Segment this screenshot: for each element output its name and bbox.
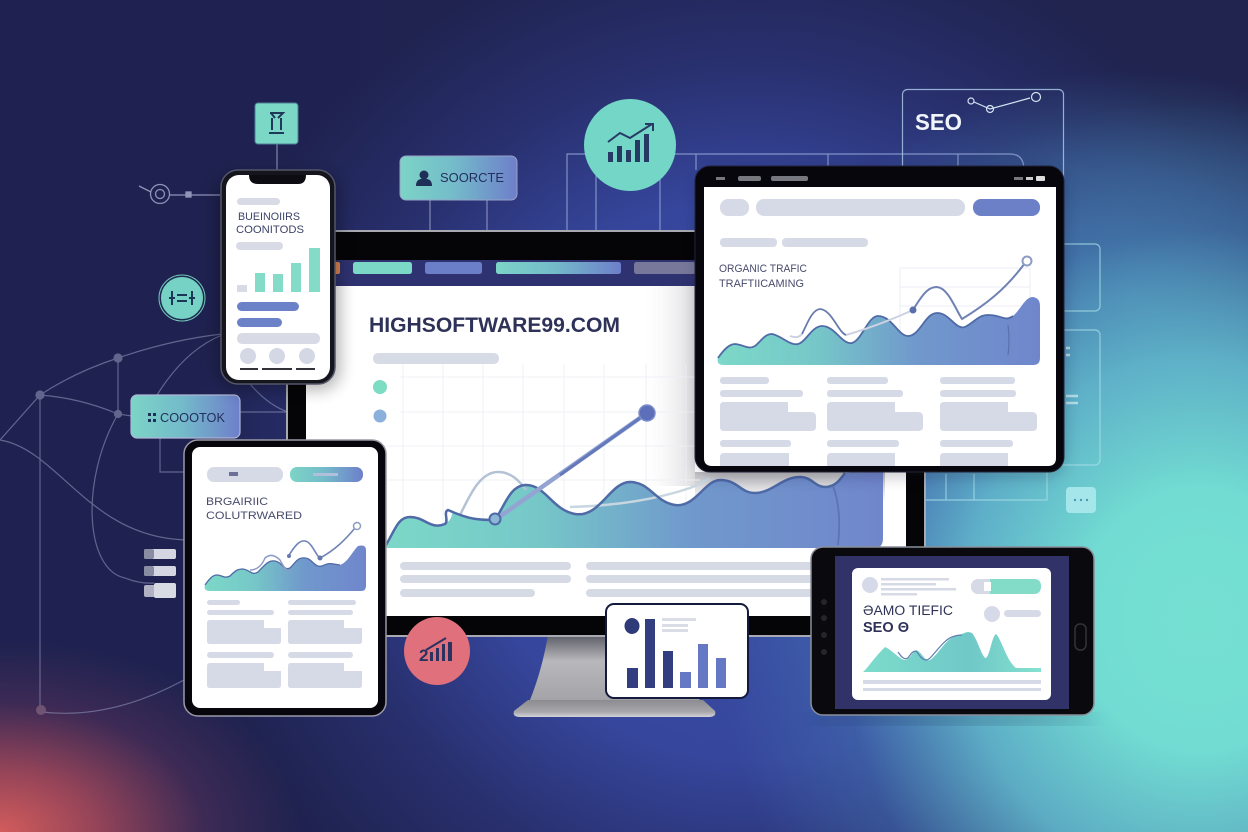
- badge: round equalizer icon: [159, 275, 205, 321]
- phone: [216, 170, 340, 390]
- monitor nav bar: [306, 260, 906, 286]
- lower tablet card: SEO Θ: [863, 620, 909, 636]
- tablet rows: [720, 377, 1037, 466]
- icon: small chip lower right: [1066, 487, 1096, 513]
- lower tablet chart: [863, 632, 1041, 672]
- status bar: [716, 176, 1045, 181]
- monitor screen: [306, 286, 906, 616]
- small stacked pills left: [144, 549, 176, 598]
- connector lines: upper circuit box: [277, 144, 1024, 232]
- site title: HIGHSOFTWARE99.COM: [369, 314, 620, 337]
- subtitle bar: [373, 353, 499, 364]
- tablet: lower right: [807, 547, 1097, 724]
- badge: SOORCTE: SOORCTE: [440, 170, 504, 185]
- icon: red circle with chart: [404, 617, 470, 685]
- monitor stand: [514, 635, 715, 717]
- badge: SOORCTE: [400, 156, 517, 200]
- tablet: left: COLUTRWARED: [206, 510, 302, 522]
- tablet: top right: [695, 166, 1064, 476]
- phone bar chart: [237, 248, 320, 292]
- legend dots: [373, 380, 387, 422]
- phone: COONITODS: [236, 224, 304, 236]
- left tablet heading: BRGAIRIIC: [206, 496, 268, 508]
- text lines below chart: [400, 562, 826, 597]
- side camera dots: [821, 599, 827, 655]
- badge: COOOTOK: COOOTOK: [160, 410, 225, 425]
- lower tablet heading: ƏAMO TIEFIC: [863, 603, 953, 618]
- monitor bezel: [287, 231, 925, 636]
- lower tablet card: [852, 568, 1051, 700]
- left tablet chart: [205, 522, 366, 591]
- tablet chart: [718, 256, 1040, 365]
- right outline panels: [925, 244, 1100, 500]
- tablet: left: [184, 440, 386, 716]
- monitor: [287, 231, 925, 717]
- icon: dots: [148, 413, 156, 422]
- left tablet rows: [207, 600, 362, 688]
- phone heading: BUEINOIIRS: [238, 211, 300, 223]
- main area chart: [385, 405, 883, 548]
- tablet heading: ORGANIC TRAFIC: [719, 263, 807, 275]
- panel: SEO frame: [902, 90, 1064, 200]
- icon: teal circle with chart: [584, 99, 676, 191]
- chart grid: [340, 364, 700, 548]
- SEO node line: [968, 92, 1040, 112]
- SEO label: SEO: [915, 109, 962, 135]
- icon: person: [416, 170, 432, 186]
- icon: target node at left of phone: [139, 184, 220, 204]
- tablet: top right: TRAFTIICAMING: [719, 278, 804, 290]
- network lines: left connections: [0, 334, 288, 715]
- badge: COOOTOK: [131, 395, 240, 438]
- icon: red circle with chart: 2: [419, 646, 428, 665]
- card: small bar chart: [606, 604, 748, 698]
- badge: top square icon: [255, 103, 298, 144]
